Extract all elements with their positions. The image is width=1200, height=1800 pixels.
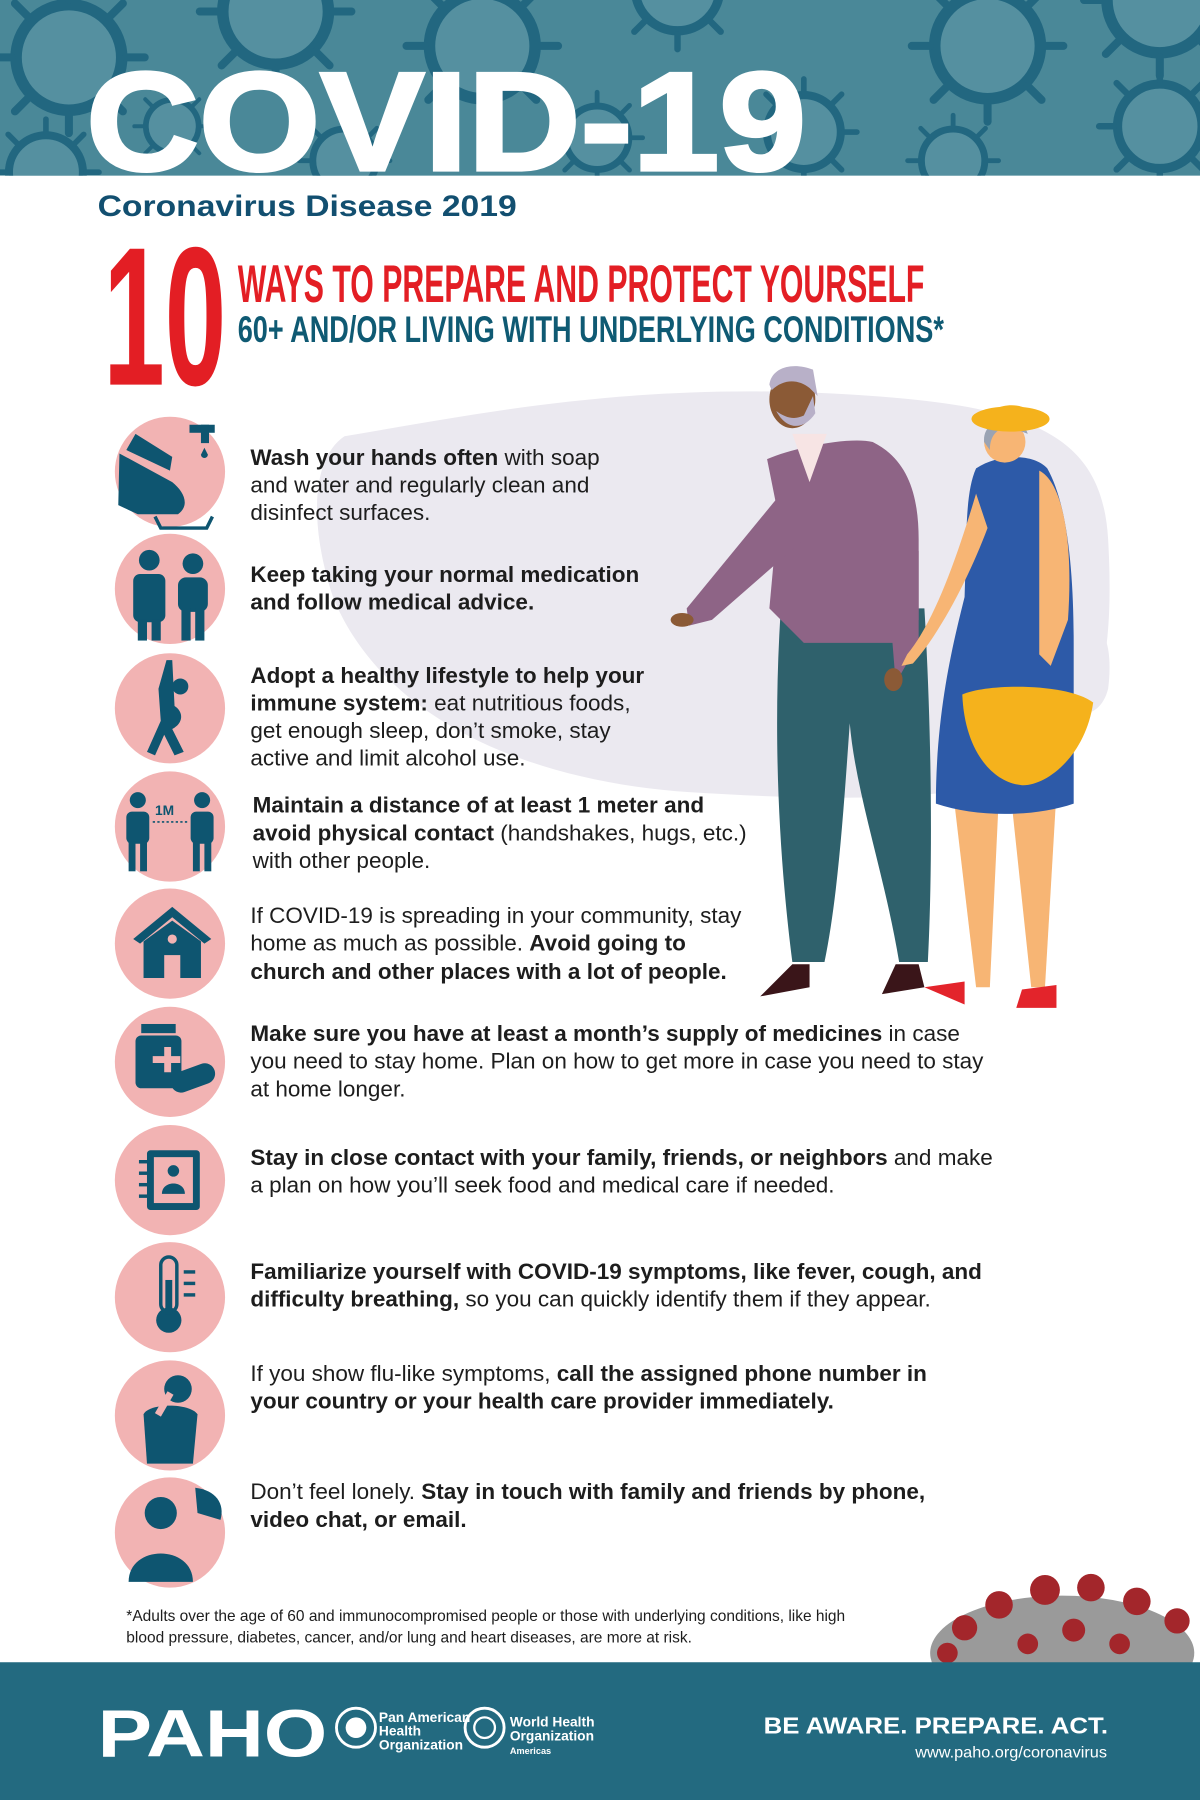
tip 5: If COVID-19 is spreading in your community, stay [250, 903, 741, 928]
tip 1: disinfect surfaces. [250, 500, 430, 525]
icon 7: contacts book [115, 1125, 225, 1235]
tip 6: you need to stay home. Plan on how to get more in case you need to stay [250, 1049, 984, 1074]
tip 3: get enough sleep, don’t smoke, stay [250, 718, 611, 743]
tip 5: home as much as possible. [250, 931, 529, 956]
icon 10: phone call [115, 1477, 225, 1588]
header band [0, 0, 1200, 176]
url: www.paho.org/coronavirus [914, 1744, 1107, 1762]
tip 3: eat nutritious foods, [434, 691, 631, 716]
footnote: *Adults over the age of 60 and immunocompromised people or those with underlying conditions, like high [126, 1608, 845, 1625]
WHO emblem: Organization [510, 1728, 594, 1743]
title: COVID-19: COVID-19 [86, 43, 806, 200]
man [777, 608, 931, 962]
tip 1: Wash your hands often with soap [250, 445, 600, 470]
tip 9: If you show flu-like symptoms, call the assigned phone number in [250, 1361, 927, 1386]
icon 2: doctor and patient [115, 534, 225, 644]
icon 9: person phone [115, 1360, 225, 1471]
tip 3: active and limit alcohol use. [250, 746, 526, 771]
tip 6: at home longer. [250, 1076, 405, 1101]
tip 10: Don’t feel lonely. Stay in touch with family and friends by phone, [250, 1479, 925, 1504]
icon: virus image [930, 1574, 1194, 1710]
tip 2: Keep taking your normal medication [250, 562, 639, 587]
tip 7: a plan on how you’ll seek food and medical care if needed. [250, 1173, 835, 1198]
tip 4: (handshakes, hugs, etc.) [500, 820, 747, 845]
icon 1: hand washing [115, 417, 225, 528]
icon 4: distance 1M [115, 771, 225, 882]
tip 4: avoid physical contact [253, 820, 495, 845]
text block: tips [250, 445, 993, 1532]
tip 1: and water and regularly clean and [250, 472, 589, 497]
tip 4: Maintain a distance of at least 1 meter and [253, 793, 704, 818]
tip 8: Familiarize yourself with COVID-19 symptoms, like fever, cough, and [250, 1259, 982, 1284]
tip 7: Stay in close contact with your family, friends, or neighbors and make [250, 1145, 993, 1170]
tip 8: so you can quickly identify them if they appear. [465, 1286, 931, 1311]
footnote: blood pressure, diabetes, cancer, and/or lung and heart diseases, are more at risk. [126, 1630, 692, 1647]
WHO emblem [465, 1708, 595, 1756]
tip 3: immune system: [250, 691, 428, 716]
footer band [0, 1662, 1200, 1800]
big number 10: 10 [103, 206, 226, 427]
subtitle: Coronavirus Disease 2019: Coronavirus Disease 2019 [98, 190, 517, 223]
tip 8: difficulty breathing, [250, 1286, 459, 1311]
tip 6: Make sure you have at least a month’s supply of medicines in case [250, 1021, 960, 1046]
tip 3: Adopt a healthy lifestyle to help your [250, 663, 644, 688]
PAHO emblem [336, 1708, 470, 1752]
tip 10: video chat, or email. [250, 1507, 467, 1532]
PAHO emblem: Health [379, 1724, 421, 1739]
PAHO emblem: Pan American [379, 1710, 470, 1725]
tip 5: Avoid going to [529, 931, 686, 956]
illustration: couple [317, 366, 1110, 1008]
woman [953, 792, 999, 987]
tip 4: with other people. [252, 848, 430, 873]
WHO emblem: Americas [510, 1746, 551, 1756]
WHO emblem: World Health [510, 1715, 595, 1730]
tip 9: your country or your health care provider immediately. [250, 1389, 834, 1414]
heading: audience: 60+ AND/OR LIVING WITH UNDERLYING CONDITIONS* [238, 309, 944, 350]
tip 2: and follow medical advice. [250, 590, 534, 615]
icon 3: exercise [115, 653, 225, 763]
slogan: BE AWARE. PREPARE. ACT. [764, 1712, 1108, 1738]
PAHO logo: PAHO [98, 1697, 327, 1771]
tip 5: church and other places with a lot of people. [250, 959, 727, 984]
PAHO emblem: Organization [379, 1737, 463, 1752]
icon 4: distance 1M: 1M [155, 803, 174, 818]
icon 8: thermometer [115, 1242, 225, 1352]
icon 6: medicine [115, 1007, 225, 1117]
icon 5: house [115, 889, 225, 999]
